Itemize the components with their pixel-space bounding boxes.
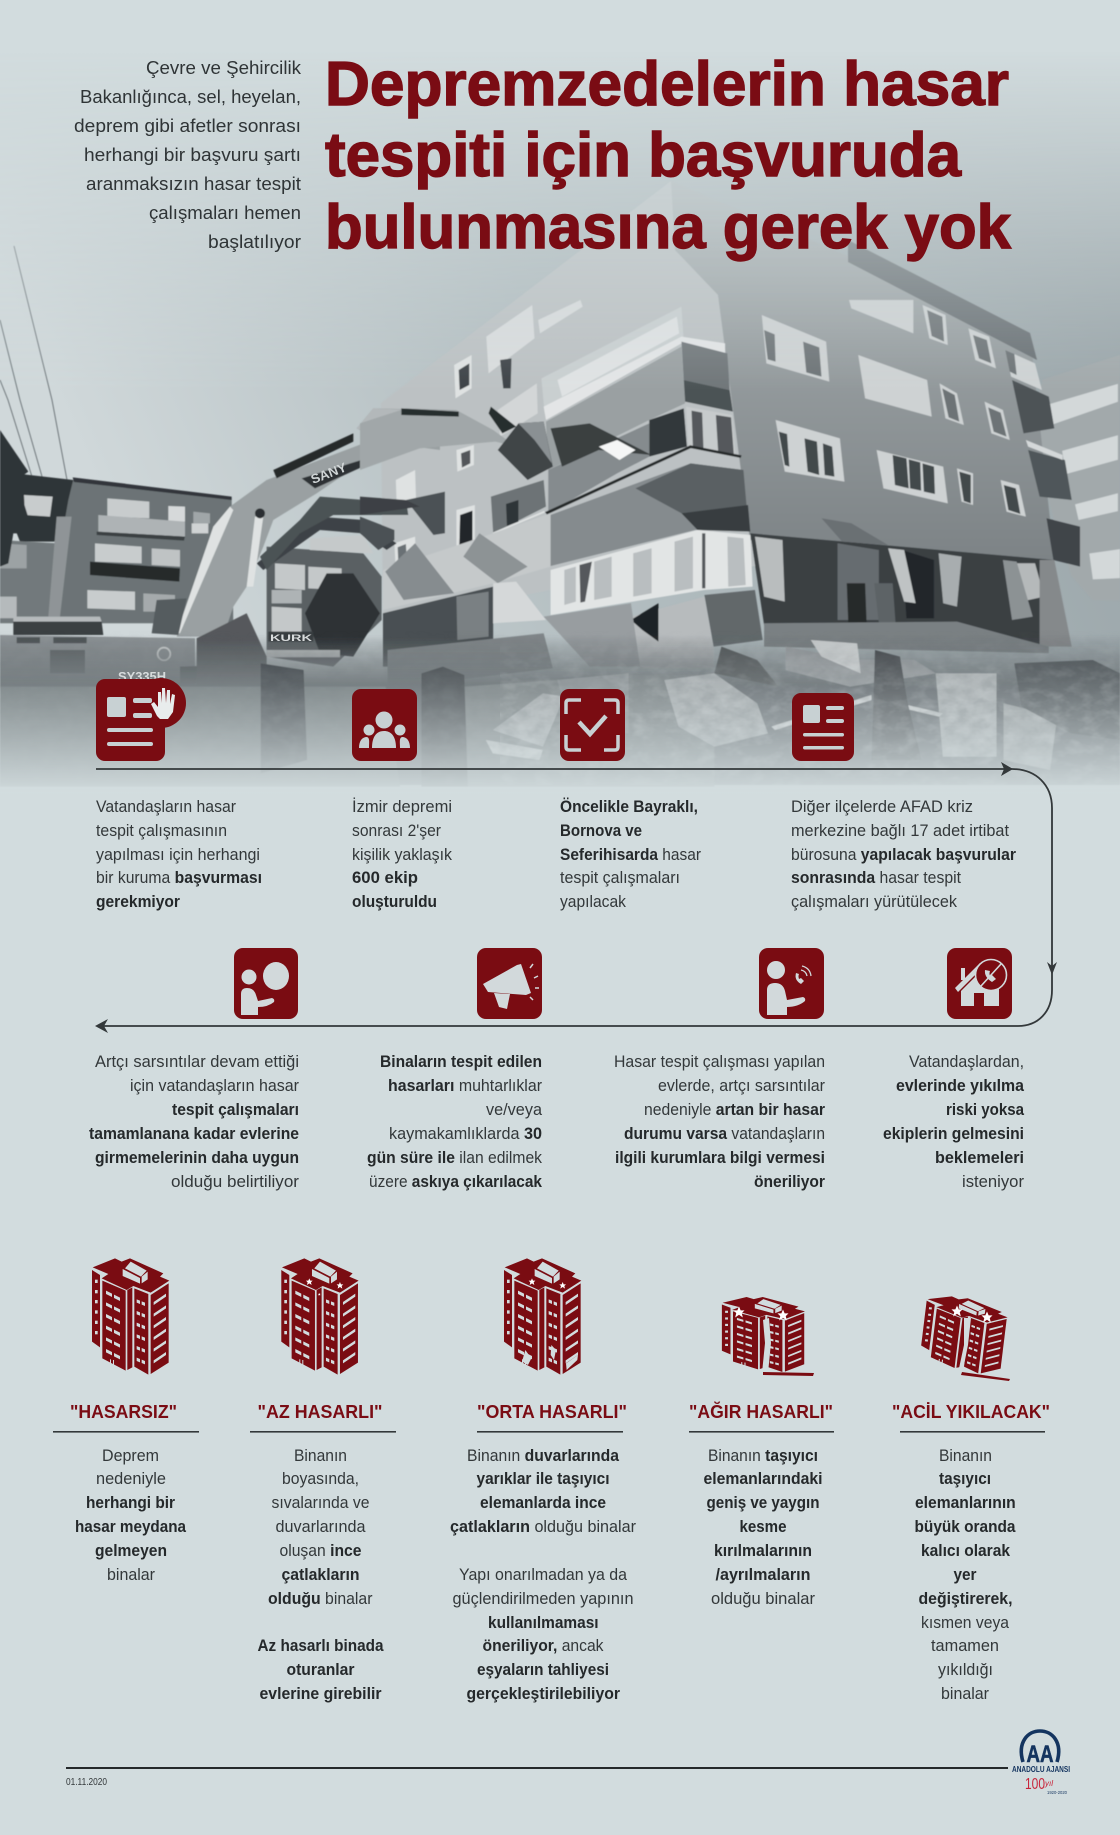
right-face windows [762, 300, 1042, 517]
column: Acil yıkılacak: "ACİL YIKILACAK" [892, 1401, 1050, 1422]
column: Orta hasarlı: eşyaların tahliyesi [477, 1661, 609, 1679]
intro paragraph [74, 58, 302, 252]
column: Ağır hasarlı: /ayrılmaların [716, 1566, 810, 1584]
title: tespiti için başvuruda [325, 121, 962, 190]
column: Az hasarlı: oturanlar [286, 1661, 355, 1679]
Anadolu Ajansı logo [1012, 1731, 1070, 1795]
step text 6: announcement: Binaların tespit edilen [380, 1053, 542, 1071]
column: Orta hasarlı: yarıklar ile taşıyıcı [476, 1470, 610, 1488]
column: Orta hasarlı: Binanın duvarlarında [467, 1447, 620, 1465]
icon: building to be demolished [919, 1293, 1010, 1381]
column: Orta hasarlı: çatlakların olduğu binalar [450, 1518, 636, 1536]
neighbouring building at right [1040, 383, 1120, 580]
step text 7: inform institutions: Hasar tespit çalışması yapılan [614, 1053, 825, 1071]
step text 3: Öncelikle Bayraklı, [560, 797, 698, 816]
step text 6: announcement [367, 1053, 543, 1191]
column: Az hasarlı: "AZ HASARLI" [258, 1401, 382, 1422]
column: Orta hasarlı: gerçekleştirilebiliyor [466, 1685, 621, 1703]
step text 1: gerekmiyor [96, 893, 181, 911]
main building faces [381, 181, 755, 625]
step text 3: Seferihisarda hasar [560, 846, 701, 864]
intro paragraph: başlatılıyor [208, 232, 301, 252]
column: Hasarsız: nedeniyle [96, 1470, 166, 1488]
column: Hasarsız: gelmeyen [95, 1542, 167, 1560]
column: Acil yıkılacak: değiştirerek, [918, 1590, 1012, 1608]
icon: slightly damaged building [281, 1258, 359, 1375]
column: Hasarsız: Deprem [102, 1447, 159, 1465]
photo lettering [118, 459, 349, 684]
step text 2 [352, 797, 453, 911]
step text 5: aftershocks: olduğu belirtiliyor [171, 1173, 300, 1191]
Anadolu Ajansı logo: 1920-2020 [1047, 1790, 1067, 1795]
step text 8: do not wait: evlerinde yıkılma [896, 1077, 1025, 1095]
hero photo: damaged building and excavators [0, 0, 1120, 815]
column: Az hasarlı: Az hasarlı binada [258, 1637, 384, 1655]
column: Az hasarlı: çatlakların [282, 1566, 360, 1584]
photo lettering: SANY [309, 459, 349, 487]
step text 4 [791, 798, 1017, 911]
step text 4: merkezine bağlı 17 adet irtibat [791, 822, 1009, 840]
step text 5: aftershocks: girmemelerinin daha uygun [95, 1149, 299, 1167]
bottom fade of the photo [0, 640, 1120, 815]
column: Acil yıkılacak: taşıyıcı [939, 1470, 991, 1488]
column: Orta hasarlı: "ORTA HASARLI" [477, 1401, 627, 1422]
main building details [383, 300, 1080, 688]
Anadolu Ajansı logo: yıl [1044, 1779, 1053, 1788]
photo lettering: KURK [270, 633, 313, 643]
step text 8: do not wait: beklemeleri [935, 1149, 1024, 1167]
intro paragraph: çalışmaları hemen [149, 203, 301, 223]
column: Acil yıkılacak: elemanlarının [915, 1494, 1016, 1512]
column: Ağır hasarlı: kırılmalarının [714, 1542, 812, 1560]
rubble base tone [0, 635, 1120, 785]
step text 5: aftershocks: Artçı sarsıntılar devam ettiği [95, 1053, 299, 1071]
column: Az hasarlı: olduğu binalar [268, 1590, 373, 1608]
step text 2: İzmir depremi [352, 797, 452, 816]
step text 2: sonrası 2'şer [352, 822, 441, 840]
icon: document [792, 693, 854, 761]
step text 1: tespit çalışmasının [96, 822, 227, 840]
column: Az hasarlı: evlerine girebilir [260, 1685, 382, 1703]
column: Hasarsız: herhangi bir [86, 1494, 176, 1512]
step text 8: do not wait [883, 1053, 1025, 1191]
title: Depremzedelerin hasar [325, 50, 1009, 119]
column: Hasarsız: hasar meydana [75, 1518, 187, 1536]
title [325, 50, 1012, 262]
column: Az hasarlı: sıvalarında ve [272, 1494, 370, 1512]
column: Orta hasarlı [450, 1401, 636, 1703]
step text 6: announcement: üzere askıya çıkarılacak [369, 1173, 543, 1191]
column: Ağır hasarlı: Binanın taşıyıcı [708, 1447, 818, 1465]
column: Acil yıkılacak [892, 1401, 1050, 1703]
step text 4: bürosuna yapılacak başvurular [791, 846, 1017, 864]
icon: megaphone [477, 948, 542, 1019]
excavators, buildings behind and machine body [0, 408, 440, 687]
column: Ağır hasarlı: geniş ve yaygın [706, 1494, 820, 1512]
Anadolu Ajansı logo: 100 [1025, 1776, 1045, 1793]
column: Hasarsız [53, 1401, 199, 1584]
icon: team [352, 689, 417, 761]
column: Ağır hasarlı [689, 1401, 834, 1608]
icon: stop hand document [96, 678, 186, 761]
column: Orta hasarlı: öneriliyor, ancak [482, 1637, 604, 1655]
step text 3: tespit çalışmaları [560, 869, 680, 887]
step text 1: bir kuruma başvurması [96, 869, 262, 887]
rubble texture [498, 652, 1120, 752]
ground-floor void [750, 533, 1069, 647]
step text 3: yapılacak [560, 893, 627, 911]
column: Az hasarlı: duvarlarında [276, 1518, 366, 1536]
column: Acil yıkılacak: kısmen veya [921, 1614, 1010, 1632]
step text 7: inform institutions: öneriliyor [754, 1173, 826, 1191]
column: Orta hasarlı: elemanlarda ince [480, 1494, 606, 1512]
icon: house with no-entry sign [947, 948, 1012, 1019]
step text 6: announcement: ve/veya [486, 1101, 543, 1119]
title: bulunmasına gerek yok [325, 193, 1012, 262]
intro paragraph: Çevre ve Şehircilik [146, 58, 302, 78]
column: Az hasarlı: Binanın [294, 1447, 347, 1465]
step text 7: inform institutions: nedeniyle artan bir hasar [644, 1101, 826, 1119]
footer rule and date: 01.11.2020 [66, 1777, 107, 1788]
intro paragraph: Bakanlığınca, sel, heyelan, [80, 87, 301, 107]
column: Hasarsız: binalar [107, 1566, 155, 1584]
photo lettering: SY335H [118, 669, 166, 684]
column: Acil yıkılacak: yer [954, 1566, 977, 1584]
column: Az hasarlı: oluşan ince [280, 1542, 362, 1560]
step text 8: do not wait: Vatandaşlardan, [909, 1053, 1024, 1071]
column: Orta hasarlı: kullanılmaması [488, 1614, 599, 1632]
step text 5: aftershocks: tamamlanana kadar evlerine [89, 1125, 299, 1143]
ground-floor glazing [551, 530, 753, 615]
step text 8: do not wait: riski yoksa [946, 1101, 1025, 1119]
column: Orta hasarlı: Yapı onarılmadan ya da [459, 1566, 628, 1584]
arm, buckets [360, 407, 553, 550]
step text 1 [96, 798, 262, 911]
column: Ağır hasarlı: olduğu binalar [711, 1590, 815, 1608]
column: Hasarsız: "HASARSIZ" [70, 1401, 177, 1422]
step text 6: announcement: gün süre ile ilan edilmek [367, 1149, 543, 1167]
step text 2: oluşturuldu [352, 893, 437, 911]
icon: undamaged building [92, 1258, 169, 1375]
left apartment block [0, 430, 233, 623]
column: Acil yıkılacak: Binanın [939, 1447, 992, 1465]
step text 4: Diğer ilçelerde AFAD kriz [791, 798, 973, 816]
step text 4: çalışmaları yürütülecek [791, 893, 958, 911]
step text 3 [560, 797, 701, 911]
step text 5: aftershocks: için vatandaşların hasar [130, 1077, 299, 1095]
step text 6: announcement: hasarları muhtarlıklar [388, 1077, 542, 1095]
step text 7: inform institutions: evlerde, artçı sarsıntılar [658, 1077, 825, 1095]
step text 7: inform institutions: ilgili kurumlara bilgi vermesi [615, 1149, 825, 1167]
step text 7: inform institutions [614, 1053, 826, 1191]
column: Acil yıkılacak: yıkıldığı [938, 1661, 993, 1679]
step text 4: sonrasında hasar tespit [791, 869, 961, 887]
column: Az hasarlı [250, 1401, 396, 1703]
column: Ağır hasarlı: "AĞIR HASARLI" [689, 1401, 833, 1422]
intro paragraph: deprem gibi afetler sonrası [74, 116, 301, 136]
intro paragraph: herhangi bir başvuru şartı [84, 145, 301, 165]
column: Acil yıkılacak: büyük oranda [914, 1518, 1016, 1536]
left-face windows [486, 305, 534, 373]
step text 1: Vatandaşların hasar [96, 798, 236, 816]
step text 5: aftershocks: tespit çalışmaları [172, 1101, 299, 1119]
column: Acil yıkılacak: tamamen [931, 1637, 999, 1655]
column: Orta hasarlı: güçlendirilmeden yapının [452, 1590, 634, 1608]
icon: person calling [759, 948, 824, 1019]
step text 5: aftershocks [89, 1053, 300, 1191]
column: Az hasarlı: boyasında, [282, 1470, 359, 1488]
process flow arrow [95, 762, 1057, 1033]
step text 3: Bornova ve [560, 822, 642, 840]
step text 2: kişilik yaklaşık [352, 846, 453, 864]
overhead wires [0, 246, 67, 480]
step text 6: announcement: kaymakamlıklarda 30 [389, 1125, 542, 1143]
intro paragraph: aranmaksızın hasar tespit [86, 174, 301, 194]
step text 7: inform institutions: durumu varsa vatandaşların [624, 1125, 825, 1143]
icon: person with speech bubble [234, 948, 298, 1019]
step text 2: 600 ekip [352, 869, 418, 887]
lower photo: rubble and rescuers [0, 640, 1120, 787]
column: Ağır hasarlı: elemanlarındaki [704, 1470, 822, 1488]
step text 8: do not wait: isteniyor [962, 1173, 1024, 1191]
Anadolu Ajansı logo: AA [1026, 1741, 1054, 1768]
icon: moderately damaged building [504, 1258, 581, 1375]
column: Acil yıkılacak: kalıcı olarak [921, 1542, 1011, 1560]
icon: heavily damaged building [722, 1297, 814, 1376]
step text 8: do not wait: ekiplerin gelmesini [883, 1125, 1024, 1143]
Anadolu Ajansı logo: ANADOLU AJANSI [1012, 1764, 1070, 1774]
column: Ağır hasarlı: kesme [740, 1518, 786, 1536]
floor balconies at the corner [541, 307, 684, 413]
step text 1: yapılması için herhangi [96, 846, 260, 864]
column: Acil yıkılacak: binalar [941, 1685, 989, 1703]
icon: verification frame [560, 689, 625, 761]
